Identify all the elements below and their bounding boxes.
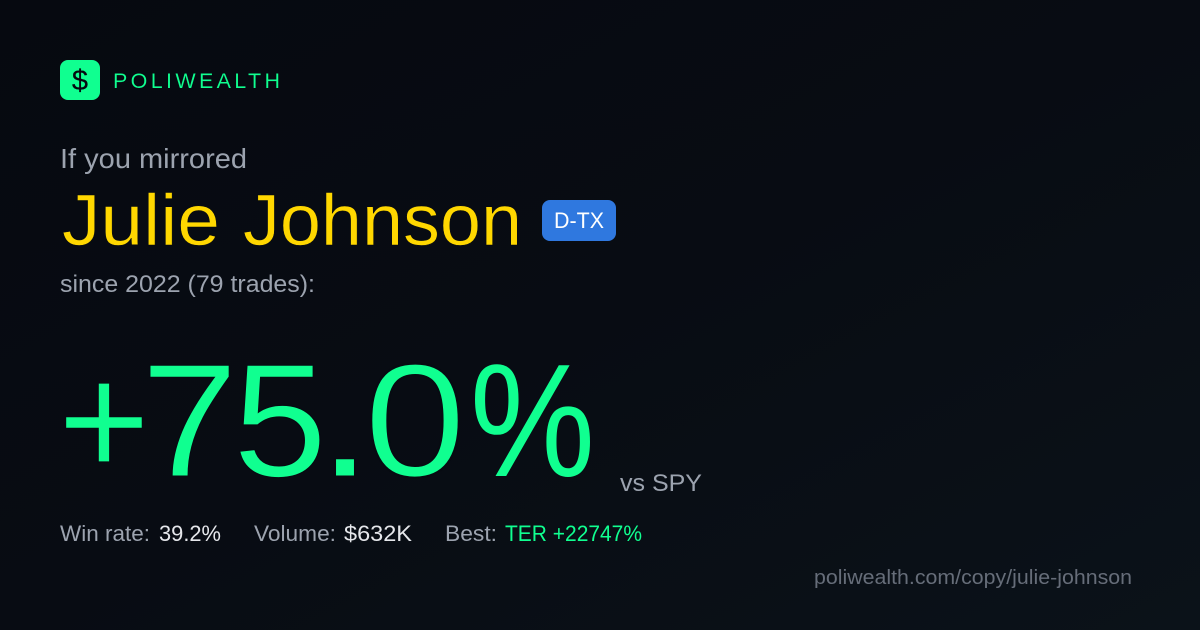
icon: dollar badge — [60, 60, 100, 100]
main return figure: 7 — [141, 331, 238, 511]
footer url: poliwealth.com/copy/julie-johnson — [814, 567, 1132, 589]
intro line: If you mirrored — [60, 143, 247, 174]
party badge: D-TX — [554, 208, 604, 233]
stat: best trade — [445, 521, 642, 546]
icon: dollar badge: $ — [72, 65, 88, 97]
main return figure: % — [470, 331, 595, 511]
stat: win rate: 39.2% — [159, 521, 221, 546]
stats row — [60, 521, 642, 546]
brand name: POLIWEALTH — [113, 69, 280, 93]
stat: best trade: Best: — [445, 521, 497, 546]
stat: win rate — [60, 521, 221, 546]
stat: volume — [254, 521, 412, 546]
stat: best trade: TER +22747% — [505, 521, 642, 546]
main return figure: 5 — [233, 331, 327, 511]
politician name: Julie — [62, 181, 220, 261]
main return figure: 0 — [364, 331, 466, 511]
main return figure: + — [58, 331, 150, 511]
logo — [60, 60, 280, 100]
stat: volume: $632K — [344, 521, 412, 546]
benchmark label: vs SPY — [620, 470, 702, 497]
main return figure: . — [317, 331, 373, 511]
stat: volume: Volume: — [254, 521, 336, 546]
party badge — [542, 200, 616, 241]
since line: since 2022 (79 trades): — [60, 271, 315, 298]
politician name: Johnson — [243, 181, 522, 261]
stat: win rate: Win rate: — [60, 521, 150, 546]
